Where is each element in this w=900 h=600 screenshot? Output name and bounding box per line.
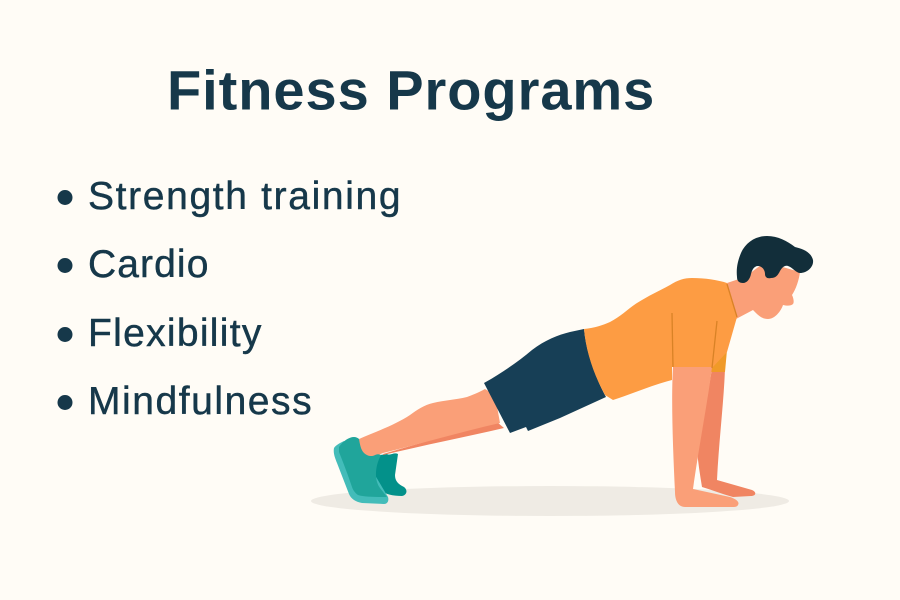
leg <box>359 389 500 456</box>
list item: Cardio: Cardio <box>88 243 210 286</box>
list item: Strength training: Strength training <box>88 175 402 218</box>
back arm <box>697 368 755 497</box>
back shoe <box>375 453 406 496</box>
shirt <box>584 278 737 400</box>
neck and head <box>727 262 800 319</box>
list item: Flexibility: Flexibility <box>88 312 263 355</box>
list item: Mindfulness: Mindfulness <box>88 380 313 423</box>
shirt crease lines <box>672 284 737 368</box>
front arm <box>672 367 739 507</box>
front shoe <box>334 437 388 504</box>
shoe upper <box>339 437 387 497</box>
bullet list <box>58 175 402 423</box>
shirt sleeve underside <box>711 345 727 372</box>
ground shadow <box>311 486 789 516</box>
shoe sole <box>334 441 388 504</box>
illustration: person doing a plank <box>311 236 813 516</box>
leg underside shadow <box>383 422 504 455</box>
hair <box>737 236 813 283</box>
title: Fitness Programs <box>167 58 655 122</box>
shorts <box>484 329 606 433</box>
